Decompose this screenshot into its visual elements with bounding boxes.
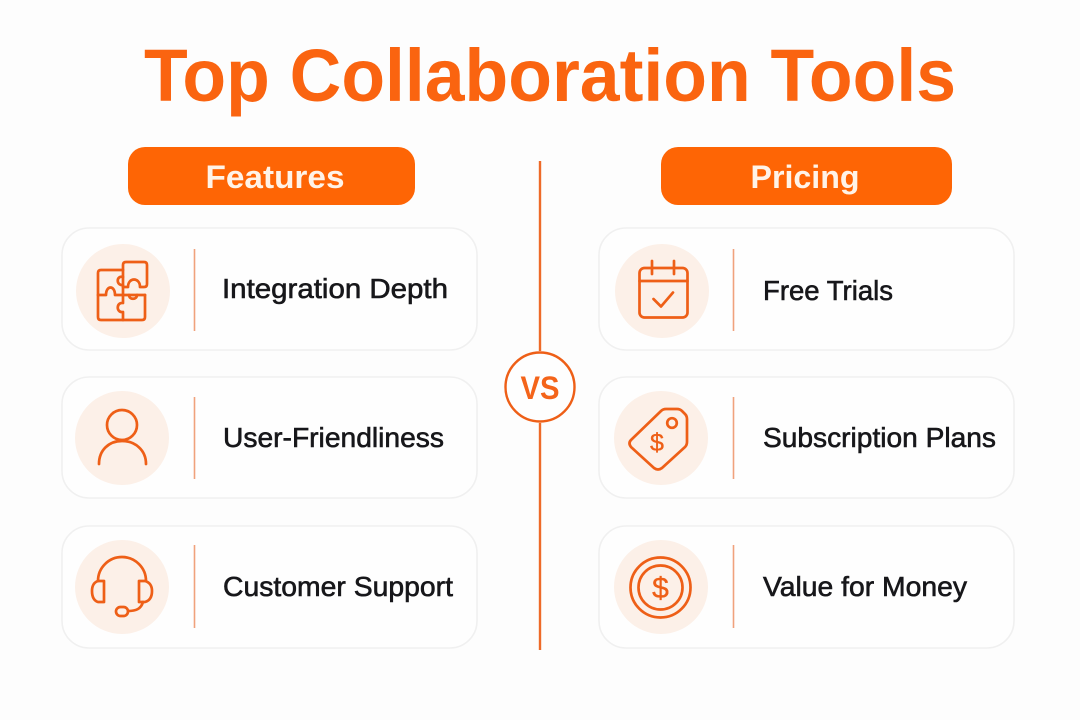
heading: pricing: Pricing <box>750 159 860 195</box>
heading: pricing <box>661 147 952 205</box>
icon text: dollar: $ <box>650 429 664 457</box>
icon: headset <box>92 557 152 616</box>
icon: calendar <box>640 261 688 318</box>
panel: integration depth <box>62 228 477 350</box>
panel: integration depth: Integration Depth <box>222 273 448 304</box>
panel: subscription plans: Subscription Plans <box>763 422 996 453</box>
heading: features: Features <box>206 159 344 195</box>
icon: user <box>99 410 146 464</box>
icon: puzzle <box>98 262 147 320</box>
panel: value for money <box>599 526 1014 648</box>
panel: value for money: Value for Money <box>763 571 967 602</box>
title: Top Collaboration Tools <box>144 34 956 117</box>
panel: user-friendliness: User-Friendliness <box>223 422 444 453</box>
icon: coin <box>630 558 690 618</box>
panel: free trials: Free Trials <box>763 275 893 306</box>
divider line <box>539 161 541 650</box>
vs badge: VS <box>520 370 560 406</box>
panel: customer support: Customer Support <box>223 571 453 602</box>
vs badge <box>506 352 574 422</box>
panel: customer support <box>62 526 477 648</box>
panel: subscription plans <box>599 377 1014 498</box>
panel: free trials <box>599 228 1014 350</box>
panel: user-friendliness <box>62 377 477 498</box>
icon text: coin dollar: $ <box>652 572 669 605</box>
heading: features <box>128 147 415 205</box>
icon: price tag <box>630 409 687 470</box>
